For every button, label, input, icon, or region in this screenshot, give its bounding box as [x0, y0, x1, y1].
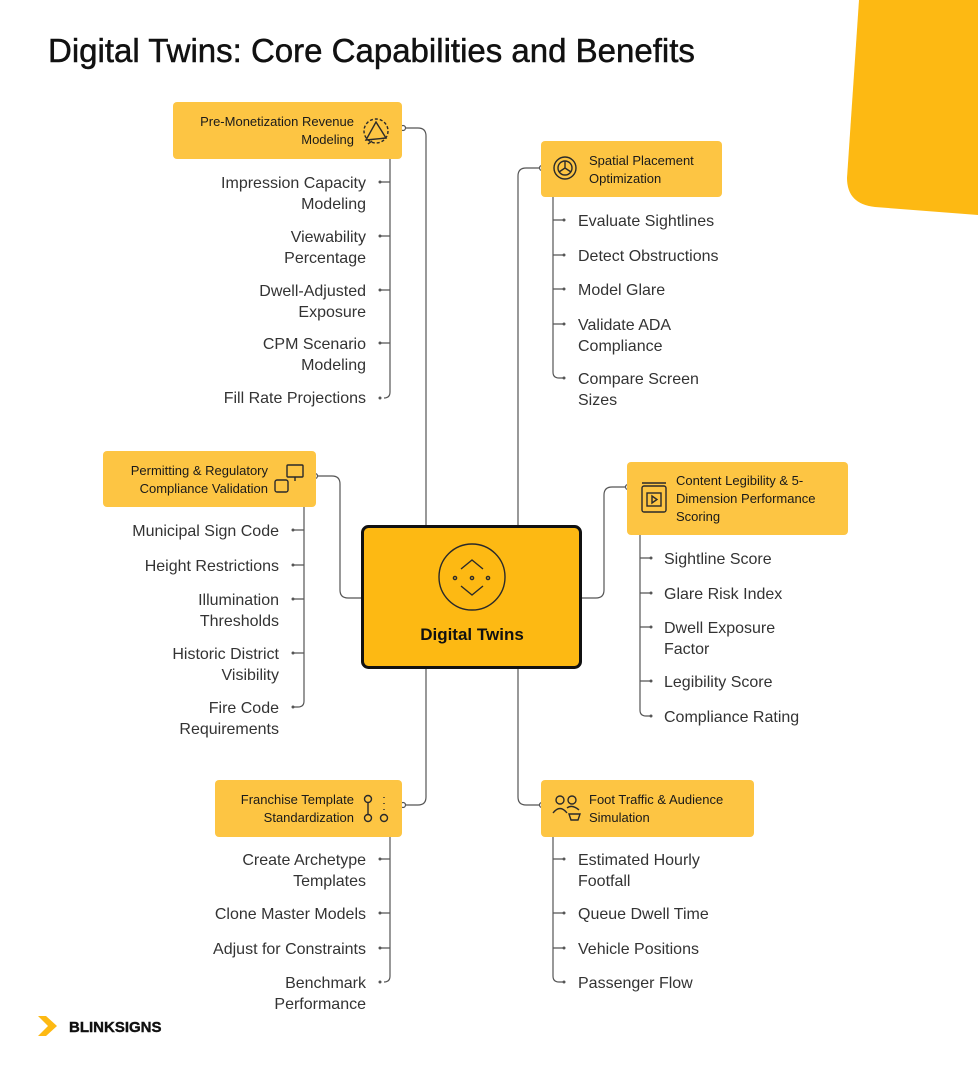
panel: spatial placement	[541, 141, 722, 409]
panel: content legibility: Scoring	[676, 509, 720, 524]
title: Digital Twins: Core Capabilities and Benefits	[48, 32, 695, 69]
panel: spatial placement: Compare Screen	[578, 371, 699, 388]
panel: foot traffic: Queue Dwell Time	[578, 906, 709, 923]
panel: pre-monetization: Impression Capacity	[221, 175, 366, 192]
panel: pre-monetization: Fill Rate Projections	[224, 390, 366, 407]
panel: pre-monetization	[173, 102, 402, 407]
panel: pre-monetization: Viewability	[291, 229, 366, 246]
panel: permitting: Thresholds	[200, 613, 279, 630]
panel: content legibility: Sightline Score	[664, 551, 772, 568]
panel: foot traffic: Footfall	[578, 873, 630, 890]
panel: franchise template	[213, 780, 402, 1013]
panel: franchise template: Benchmark	[285, 975, 367, 992]
panel: permitting	[103, 451, 316, 738]
panel: permitting: Historic District	[172, 646, 280, 663]
panel: permitting: Fire Code	[209, 700, 279, 717]
panel: spatial placement: Validate ADA	[578, 317, 671, 334]
panel: franchise template: Franchise Template	[241, 792, 354, 807]
panel: content legibility	[627, 462, 848, 726]
panel: spatial placement: Compliance	[578, 338, 663, 355]
icon: template	[364, 796, 388, 822]
panel: pre-monetization: Modeling	[301, 132, 354, 147]
panel: spatial placement: Spatial Placement	[589, 153, 694, 168]
panel: permitting: Illumination	[198, 592, 279, 609]
panel: content legibility: Dimension Performance	[676, 491, 815, 506]
panel: pre-monetization: Modeling	[301, 357, 366, 374]
icon: megaphone	[364, 119, 388, 144]
connectors from center	[312, 128, 631, 805]
panel: pre-monetization: Exposure	[298, 304, 366, 321]
panel: spatial placement: Model Glare	[578, 282, 665, 299]
panel: permitting: Height Restrictions	[145, 558, 279, 575]
icon: digital twin	[439, 544, 505, 610]
panel: content legibility: Compliance Rating	[664, 709, 799, 726]
center node: Digital Twins	[420, 625, 524, 644]
icon: spatial	[554, 157, 576, 179]
panel: foot traffic: Estimated Hourly	[578, 852, 700, 869]
icon: monitor	[275, 465, 303, 492]
panel: permitting: Permitting & Regulatory	[131, 463, 268, 478]
panel: franchise template: Create Archetype	[242, 852, 366, 869]
panel: pre-monetization: Modeling	[301, 196, 366, 213]
panel: foot traffic: Simulation	[589, 810, 650, 825]
panel: spatial placement: Evaluate Sightlines	[578, 213, 714, 230]
decorative corner shape	[847, 0, 978, 215]
panel: foot traffic	[541, 780, 754, 992]
panel: spatial placement: Optimization	[589, 171, 661, 186]
panel: content legibility: Dwell Exposure	[664, 620, 775, 637]
panel: pre-monetization: CPM Scenario	[263, 336, 366, 353]
panel: foot traffic: Vehicle Positions	[578, 941, 699, 958]
panel: spatial placement: Detect Obstructions	[578, 248, 718, 265]
panel: pre-monetization: Pre-Monetization Revenue	[200, 114, 354, 129]
panel: permitting: Requirements	[179, 721, 279, 738]
panel: foot traffic: Foot Traffic & Audience	[589, 792, 723, 807]
panel: permitting: Municipal Sign Code	[132, 523, 279, 540]
panel: content legibility: Factor	[664, 641, 710, 658]
panel: franchise template: Standardization	[264, 810, 354, 825]
panel: pre-monetization: Percentage	[284, 250, 366, 267]
panel: content legibility: Content Legibility & 5-	[676, 473, 803, 488]
icon: video	[642, 483, 666, 512]
panel: permitting: Compliance Validation	[140, 481, 268, 496]
panel: content legibility: Glare Risk Index	[664, 586, 782, 603]
panel: franchise template: Adjust for Constraints	[213, 941, 366, 958]
panel: foot traffic: Passenger Flow	[578, 975, 693, 992]
panel: pre-monetization: Dwell-Adjusted	[259, 283, 366, 300]
panel: franchise template: Performance	[274, 996, 366, 1013]
panel: franchise template: Templates	[293, 873, 366, 890]
logo	[38, 1016, 162, 1036]
panel: spatial placement: Sizes	[578, 392, 617, 409]
center node	[362, 526, 580, 668]
icon: people	[553, 796, 580, 820]
panel: franchise template: Clone Master Models	[215, 906, 366, 923]
logo: BLINKSIGNS	[69, 1019, 162, 1036]
panel: permitting: Visibility	[222, 667, 279, 684]
panel: content legibility: Legibility Score	[664, 674, 773, 691]
